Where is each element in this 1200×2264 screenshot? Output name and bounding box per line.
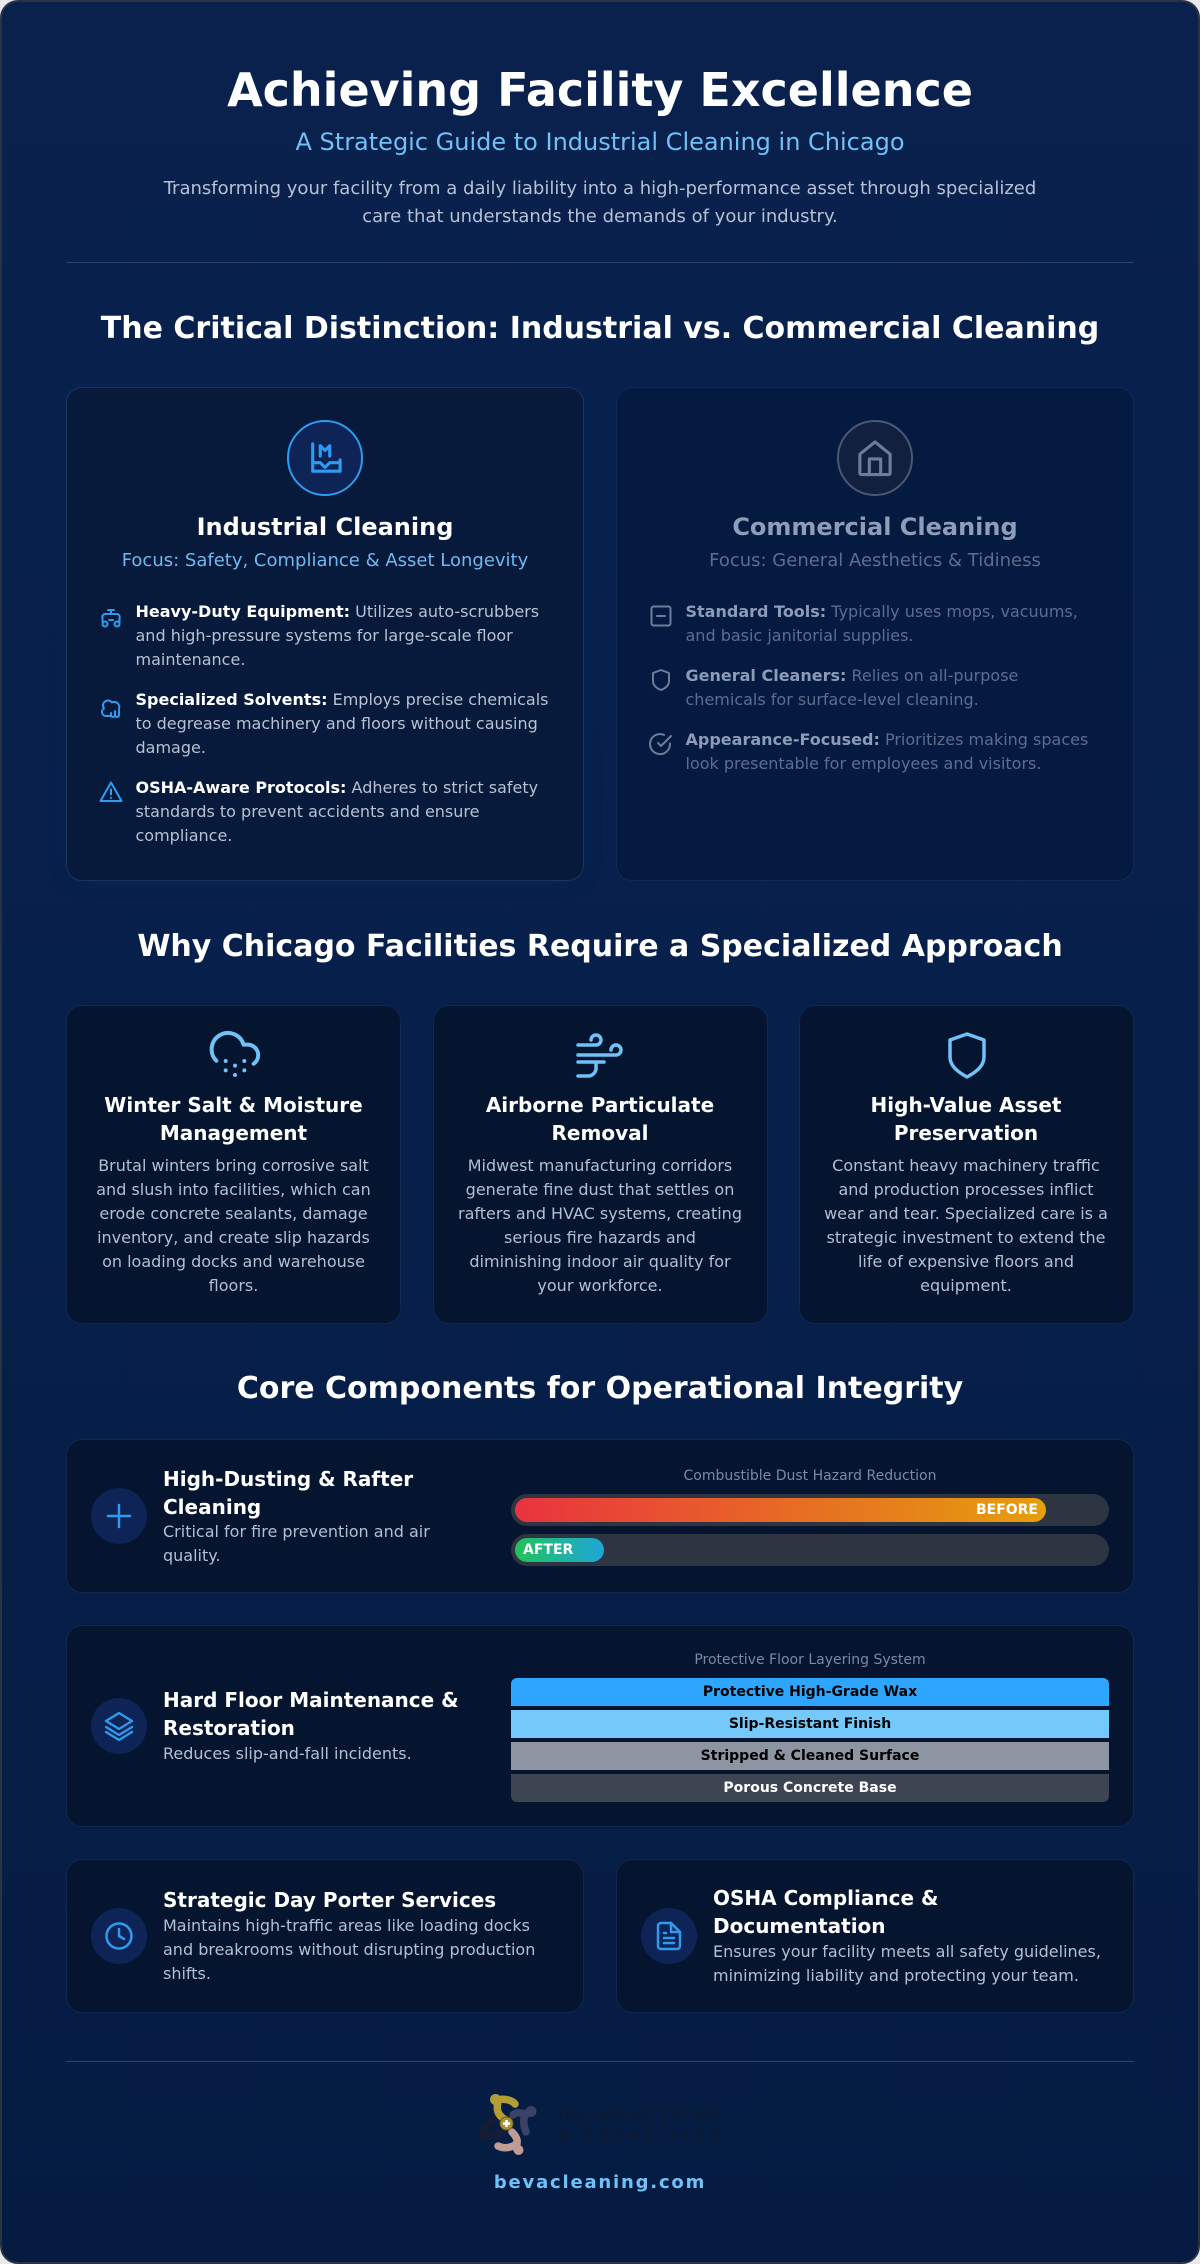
item: osha-aware protocols: compliance. — [136, 826, 232, 844]
panel: day porter — [66, 1859, 584, 2013]
intro text: care that understands the demands of your industry. — [362, 206, 838, 226]
intro text — [164, 178, 1036, 226]
description — [163, 1916, 535, 1982]
heading — [104, 1093, 363, 1145]
body text: your workforce. — [537, 1276, 663, 1295]
chart title: Protective Floor Layering System — [694, 1652, 926, 1668]
chart: floor layers — [511, 1652, 1109, 1802]
body text: diminishing indoor air quality for — [469, 1252, 731, 1271]
body text: floors. — [209, 1276, 258, 1295]
icon: equipment — [101, 609, 121, 628]
heading: why chicago: Why Chicago Facilities Require a Specialized Approach — [137, 929, 1063, 964]
heading: Management — [160, 1121, 307, 1145]
heading — [486, 1093, 714, 1145]
heading: Removal — [552, 1121, 648, 1145]
heading: High-Dusting & Rafter — [163, 1466, 413, 1490]
heading: commercial: Commercial Cleaning — [732, 513, 1018, 541]
body text — [458, 1156, 742, 1295]
body text: life of expensive floors and — [858, 1252, 1074, 1271]
panel: high-dusting — [66, 1439, 1134, 1593]
description — [713, 1942, 1101, 1984]
panel: commercial cleaning — [616, 387, 1134, 881]
body text: and production processes inflict — [838, 1180, 1094, 1199]
body text: strategic investment to extend the — [827, 1228, 1105, 1247]
heading: Strategic Day Porter Services — [163, 1888, 496, 1912]
icon: document — [641, 1908, 697, 1964]
item: general cleaners: chemicals for surface-level cleaning. — [686, 690, 979, 708]
chart title: Combustible Dust Hazard Reduction — [683, 1468, 936, 1484]
body text: inventory, and create slip hazards — [97, 1228, 370, 1247]
chart: dust hazard reduction — [511, 1468, 1109, 1566]
heading: High-Value Asset — [871, 1093, 1061, 1117]
icon: logo mark — [478, 2094, 536, 2155]
heading: Restoration — [163, 1716, 295, 1740]
body text: Midwest manufacturing corridors — [468, 1156, 732, 1175]
focus line: Focus: Safety, Compliance & Asset Longevity — [122, 550, 528, 571]
heading — [713, 1886, 938, 1938]
intro text: Transforming your facility from a daily liability into a high-performance asset through specialized — [164, 178, 1036, 198]
item: standard tools: Standard Tools: Typically uses mops, vacuums, — [686, 602, 1078, 620]
body text: generate fine dust that settles on — [466, 1180, 734, 1199]
icon: solvent — [101, 700, 120, 718]
layer: surface: Stripped & Cleaned Surface — [701, 1748, 919, 1764]
body text: serious fire hazards and — [504, 1228, 696, 1247]
layer: surface — [511, 1742, 1109, 1770]
body text: Constant heavy machinery traffic — [832, 1156, 1100, 1175]
heading: core components: Core Components for Operational Integrity — [237, 1371, 963, 1406]
heading: Cleaning — [163, 1494, 261, 1518]
icon: layers — [91, 1698, 147, 1754]
icon: house — [837, 420, 913, 496]
item: heavy-duty equipment: and high-pressure systems for large-scale floor — [136, 626, 513, 644]
heading: Winter Salt & Moisture — [104, 1093, 363, 1117]
logo sub-name: & ASSOCIATES — [557, 2126, 725, 2144]
bar: before — [511, 1494, 1109, 1526]
item: appearance-focused: Appearance-Focused: Prioritizes making spaces — [686, 730, 1088, 748]
item: appearance-focused — [686, 730, 1088, 772]
item: specialized solvents — [136, 690, 548, 756]
body text — [824, 1156, 1108, 1295]
description: Critical for fire prevention and air — [163, 1522, 430, 1540]
focus line: Focus: General Aesthetics & Tidiness — [709, 550, 1041, 571]
heading: Airborne Particulate — [486, 1093, 714, 1117]
item: standard tools: and basic janitorial supplies. — [686, 626, 914, 644]
description: minimizing liability and protecting your team. — [713, 1966, 1079, 1984]
icon: factory chart — [287, 420, 363, 496]
description: quality. — [163, 1546, 221, 1564]
heading — [163, 1688, 459, 1740]
description: and breakrooms without disrupting production — [163, 1940, 535, 1958]
panel: osha compliance — [616, 1859, 1134, 2013]
bar: after: AFTER — [523, 1542, 573, 1558]
panel: airborne particulate — [432, 1005, 768, 1324]
body text — [96, 1156, 371, 1295]
heading: Preservation — [894, 1121, 1038, 1145]
panel: hard floor — [66, 1625, 1134, 1827]
subtitle: A Strategic Guide to Industrial Cleaning in Chicago — [296, 128, 904, 156]
body text: Brutal winters bring corrosive salt — [98, 1156, 369, 1175]
icon: shield — [652, 669, 670, 691]
heading: industrial: Industrial Cleaning — [197, 513, 453, 541]
item: osha-aware protocols — [136, 778, 538, 844]
panel: industrial cleaning — [66, 387, 584, 881]
heading: Hard Floor Maintenance & — [163, 1688, 459, 1712]
body text: on loading docks and warehouse — [102, 1252, 365, 1271]
icon: shield — [948, 1032, 986, 1079]
footer logo — [478, 2094, 725, 2155]
heading — [163, 1466, 414, 1518]
description: Reduces slip-and-fall incidents. — [163, 1744, 412, 1762]
icon: warning — [100, 782, 122, 802]
logo name: DR. MARI TILAK — [557, 2105, 721, 2126]
item: osha-aware protocols: standards to prevent accidents and ensure — [136, 802, 479, 820]
icon: check circle — [649, 733, 672, 756]
heading: critical distinction: The Critical Distinction: Industrial vs. Commercial Cleaning — [101, 311, 1099, 346]
website url: bevacleaning.com — [494, 2172, 706, 2193]
item: heavy-duty equipment: maintenance. — [136, 650, 245, 668]
title: Achieving Facility Excellence — [227, 62, 973, 116]
panel: winter salt — [66, 1005, 401, 1324]
item: heavy-duty equipment: Heavy-Duty Equipment: Utilizes auto-scrubbers — [136, 602, 539, 620]
heading: OSHA Compliance & — [713, 1886, 938, 1910]
layer: wax: Protective High-Grade Wax — [703, 1684, 917, 1700]
body text: rafters and HVAC systems, creating — [458, 1204, 742, 1223]
description — [163, 1522, 430, 1564]
item: standard tools — [686, 602, 1078, 644]
item: osha-aware protocols: OSHA-Aware Protocols: Adheres to strict safety — [136, 778, 538, 796]
description: shifts. — [163, 1964, 211, 1982]
item: specialized solvents: to degrease machinery and floors without causing — [136, 714, 538, 732]
body text: and slush into facilities, which can — [96, 1180, 371, 1199]
body text: erode concrete sealants, damage — [99, 1204, 368, 1223]
body text: wear and tear. Specialized care is a — [824, 1204, 1108, 1223]
panel: high-value asset — [798, 1005, 1134, 1324]
item: specialized solvents: damage. — [136, 738, 206, 756]
item: heavy-duty equipment — [136, 602, 539, 668]
layer: finish — [511, 1710, 1109, 1738]
item: appearance-focused: look presentable for employees and visitors. — [686, 754, 1041, 772]
description: Ensures your facility meets all safety guidelines, — [713, 1942, 1101, 1960]
bar: before: BEFORE — [976, 1502, 1038, 1518]
bar: after — [511, 1534, 1109, 1566]
layer: wax — [511, 1678, 1109, 1706]
icon: clock — [91, 1908, 147, 1964]
icon: plus — [91, 1488, 147, 1544]
item: specialized solvents: Specialized Solvents: Employs precise chemicals — [136, 690, 548, 708]
icon: minus square — [650, 606, 672, 626]
description: Maintains high-traffic areas like loading docks — [163, 1916, 530, 1934]
item: general cleaners — [686, 666, 1018, 708]
icon: wind — [576, 1033, 623, 1078]
layer: base: Porous Concrete Base — [723, 1780, 897, 1796]
heading — [871, 1093, 1061, 1145]
layer: base — [511, 1774, 1109, 1802]
icon: snow cloud — [210, 1030, 260, 1077]
header — [164, 62, 1036, 226]
item: general cleaners: General Cleaners: Relies on all-purpose — [686, 666, 1018, 684]
heading: Documentation — [713, 1914, 886, 1938]
body text: equipment. — [920, 1276, 1012, 1295]
layer: finish: Slip-Resistant Finish — [729, 1716, 891, 1732]
